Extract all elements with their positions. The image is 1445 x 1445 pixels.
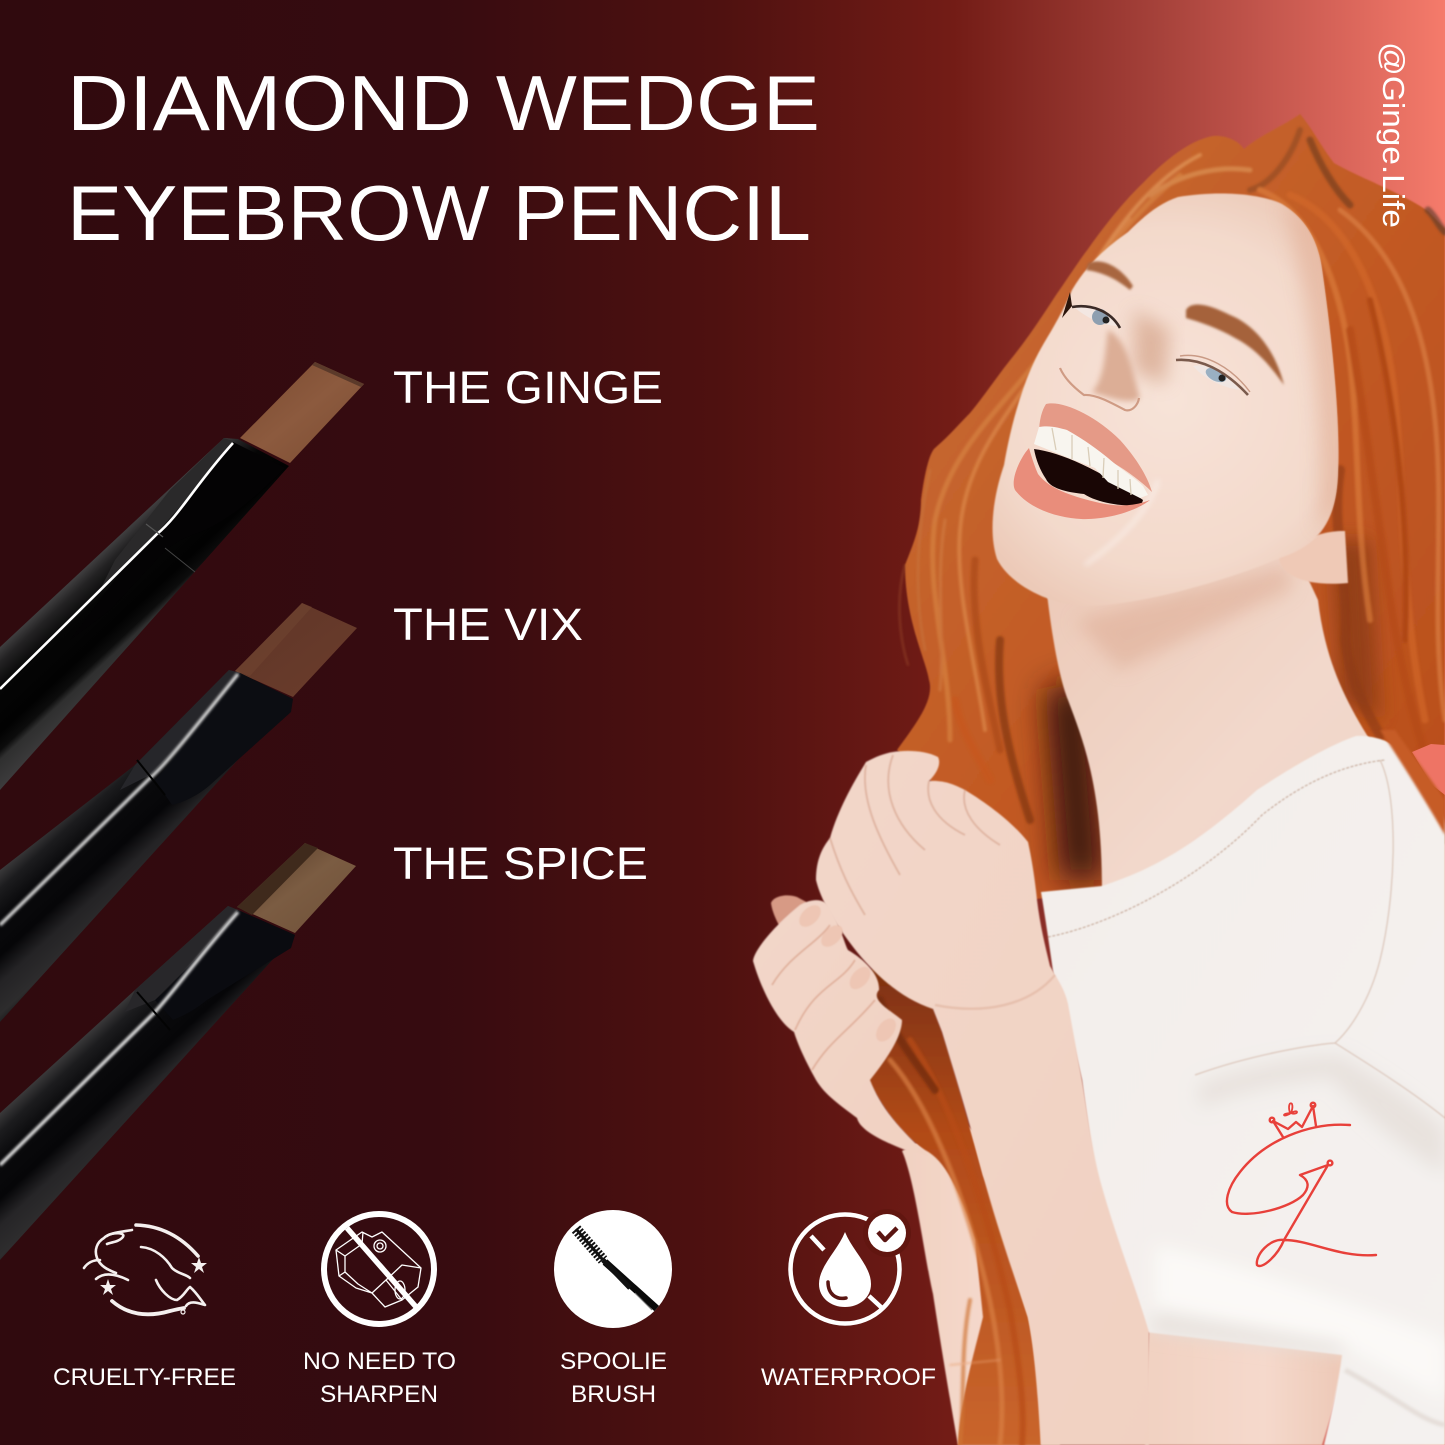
shirt: neck seam stitching <box>1048 760 1385 937</box>
fingernails <box>795 901 900 1045</box>
logo: crowned G L monogram <box>1227 1103 1376 1266</box>
icon labels: NO NEED TO <box>303 1348 456 1375</box>
hair: lower lock strands <box>880 1000 1023 1445</box>
hair strands <box>899 130 1445 820</box>
face: temple shading <box>1284 208 1338 524</box>
icon labels: WATERPROOF <box>761 1364 936 1391</box>
label: the ginge: THE GINGE <box>393 362 663 413</box>
hair: strand over shoulder <box>1380 730 1445 835</box>
hair: back mass <box>897 114 1445 900</box>
shirt: cuff highlight <box>1155 1245 1445 1400</box>
lower hand and fingers <box>753 895 929 1156</box>
icon: waterproof drop <box>790 1209 911 1324</box>
face <box>993 193 1350 606</box>
pencil: the vix <box>0 603 357 1022</box>
ear <box>1279 531 1348 584</box>
pencil: the ginge <box>0 362 364 790</box>
icon labels <box>53 1348 936 1408</box>
face: smile line <box>1085 480 1158 565</box>
icon labels: SPOOLIE <box>560 1348 667 1375</box>
hair: right shadow <box>1330 540 1380 720</box>
neck <box>1046 540 1370 890</box>
title: EYEBROW PENCIL <box>67 169 811 257</box>
shirt <box>1041 736 1445 1445</box>
icon: cruelty-free leaping rabbit <box>84 1225 207 1314</box>
face: eye socket shading <box>1133 310 1170 385</box>
logo: crown <box>1273 1106 1316 1137</box>
label: the vix: THE VIX <box>393 599 583 650</box>
title: DIAMOND WEDGE <box>67 59 820 147</box>
pencil: the spice <box>0 843 356 1260</box>
label: the spice: THE SPICE <box>393 838 648 889</box>
shirt: sleeve seam <box>1195 760 1445 1118</box>
shirt: fold shadows <box>1198 1055 1445 1175</box>
woman holding her red hair <box>753 114 1445 1445</box>
icon labels: BRUSH <box>571 1381 656 1408</box>
nose <box>1060 330 1140 410</box>
title <box>67 59 820 257</box>
background peek behind shoulder hair <box>1412 744 1445 795</box>
right eyebrow <box>1186 305 1284 385</box>
handle text: @Ginge.Life <box>1376 42 1411 228</box>
mouth <box>1014 403 1152 519</box>
upper arm and hand <box>816 751 1149 1445</box>
neck shadow <box>1075 565 1290 670</box>
hair: dark shadow under the jaw <box>1045 680 1105 880</box>
left eye <box>1062 292 1120 328</box>
left eyebrow <box>1086 261 1133 290</box>
right eye <box>1176 355 1250 395</box>
icon: spoolie brush <box>554 1210 672 1328</box>
icon labels: SHARPEN <box>320 1381 438 1408</box>
upper arm below the sleeve <box>1145 1330 1344 1445</box>
hand: knuckles and finger creases <box>830 755 1000 915</box>
icon: no need to sharpen <box>324 1214 434 1324</box>
lower forearm <box>902 1120 1060 1445</box>
icon labels: CRUELTY-FREE <box>53 1364 236 1391</box>
hair: long lower lock <box>853 960 1041 1445</box>
